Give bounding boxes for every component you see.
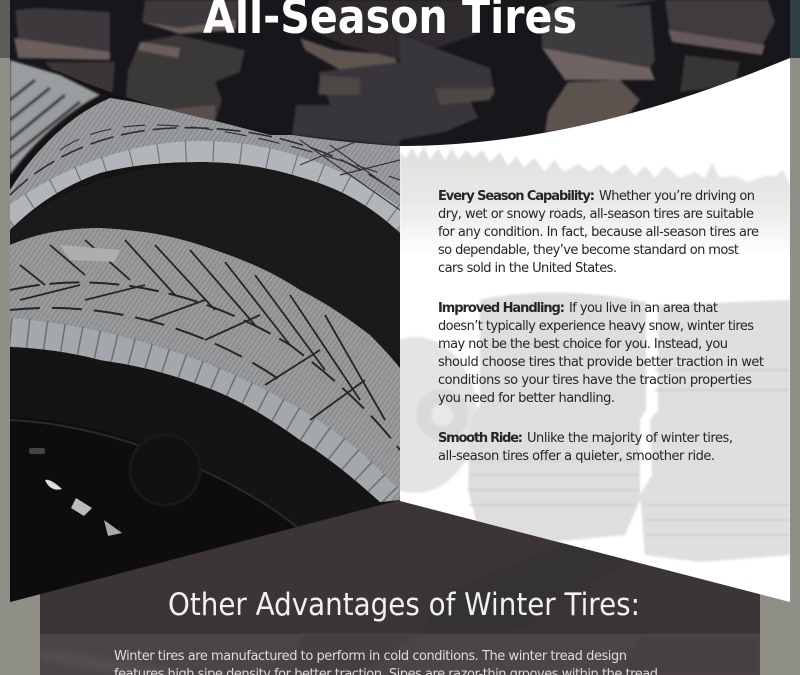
rim marks xyxy=(29,448,122,536)
text block: smooth ride: Unlike the majority of winter tires, xyxy=(527,431,733,446)
text block: winter tires xyxy=(114,649,658,675)
text block: improved handling: you need for better handling. xyxy=(438,391,615,406)
text block: smooth ride xyxy=(438,431,733,464)
text block: smooth ride: Smooth Ride: xyxy=(438,431,523,446)
text block: every season capability: cars sold in the United States. xyxy=(438,261,617,276)
text block: every season capability xyxy=(438,189,759,276)
white text panel xyxy=(400,58,790,602)
text block: improved handling: If you live in an area that xyxy=(569,301,718,316)
header tread photo xyxy=(10,0,790,150)
heading: other advantages: Other Advantages of Winter Tires: xyxy=(168,587,640,623)
text block: every season capability: so dependable, they’ve become standard on most xyxy=(438,243,739,258)
back tire tread xyxy=(10,60,100,175)
text block: every season capability: Every Season Capability: xyxy=(438,189,595,204)
text block: every season capability: dry, wet or snowy roads, all-season tires are suitable xyxy=(438,207,754,222)
upper tire tread xyxy=(10,90,400,240)
text block: every season capability: for any condition. In fact, because all-season tires are xyxy=(438,225,759,240)
text block: every season capability: Whether you’re driving on xyxy=(599,189,755,204)
dark panel: other advantages xyxy=(40,500,760,675)
upper tire sidewall xyxy=(10,163,400,360)
tire photo xyxy=(10,50,400,610)
text block: improved handling xyxy=(438,301,764,406)
text block: improved handling: may not be the best choice for you. Instead, you xyxy=(438,337,728,352)
lower tire sidewall and rim xyxy=(10,527,296,602)
text block: smooth ride: all-season tires offer a quieter, smoother ride. xyxy=(438,449,715,464)
lower tire tread xyxy=(10,225,400,510)
text block: improved handling: Improved Handling: xyxy=(438,301,565,316)
text block: winter tires: Winter tires are manufactured to perform in cold conditions. The winter tread design xyxy=(114,649,627,664)
text block: improved handling: doesn’t typically experience heavy snow, winter tires xyxy=(438,319,754,334)
text block: improved handling: should choose tires that provide better traction in wet xyxy=(438,355,764,370)
faded forest and tire stacks backdrop xyxy=(400,146,790,562)
text block: improved handling: conditions so your tires have the traction properties xyxy=(438,373,752,388)
